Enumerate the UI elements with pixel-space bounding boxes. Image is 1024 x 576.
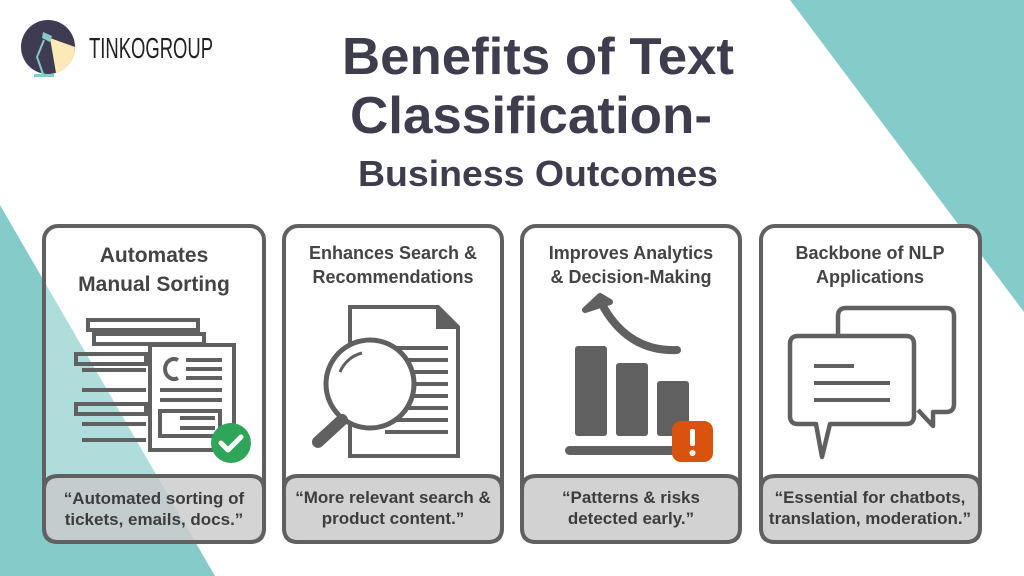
card 1 xyxy=(44,226,264,542)
card 2: Enhances Search & xyxy=(309,243,477,263)
card 3: & Decision-Making xyxy=(550,267,712,287)
icon: warning badge xyxy=(672,421,713,462)
title: Business Outcomes xyxy=(358,153,718,194)
icon: check badge xyxy=(211,423,251,463)
title: Classification- xyxy=(350,87,712,145)
icon: documents stack xyxy=(76,320,234,450)
card 3 xyxy=(522,226,740,542)
card 2: “More relevant search & xyxy=(295,488,491,507)
card 3: “Patterns & risks xyxy=(562,488,700,507)
card 1: Manual Sorting xyxy=(78,273,230,296)
card 2: Recommendations xyxy=(312,267,474,287)
card 4 xyxy=(761,226,980,542)
icon: bar chart with arrow xyxy=(565,296,689,455)
card 1: Automates xyxy=(100,244,208,267)
card 1: “Automated sorting of xyxy=(64,489,245,508)
card 4: “Essential for chatbots, xyxy=(775,488,965,507)
card 2 xyxy=(284,226,502,542)
icon: document magnifier xyxy=(318,307,458,456)
card 1: tickets, emails, docs.” xyxy=(65,510,243,529)
card 4: Applications xyxy=(816,267,924,287)
title xyxy=(342,28,734,194)
icon: chat bubbles xyxy=(790,308,954,457)
card 4: translation, moderation.” xyxy=(769,509,971,528)
card 4: Backbone of NLP xyxy=(795,243,945,263)
card 3: Improves Analytics xyxy=(549,243,713,263)
title: Benefits of Text xyxy=(342,28,734,86)
logo: TINKOGROUP xyxy=(89,33,213,65)
logo xyxy=(21,20,213,77)
card 3: detected early.” xyxy=(568,509,694,528)
card 2: product content.” xyxy=(322,509,464,528)
